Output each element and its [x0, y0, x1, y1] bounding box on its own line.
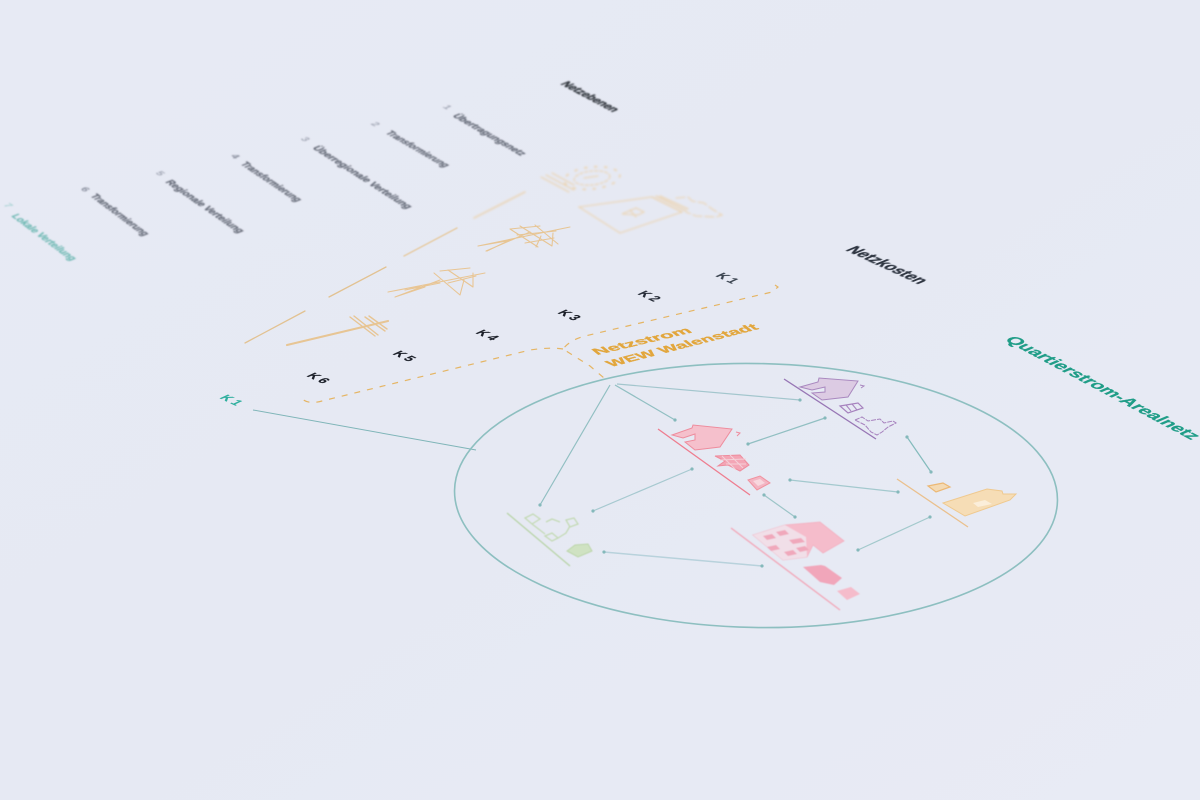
- heading: Quartierstrom-Arealnetz: Quartierstrom-Arealnetz: [1000, 334, 1200, 442]
- label: K6: K 6: [303, 371, 333, 385]
- label: level 2: Transformierung: [382, 130, 453, 169]
- label: level 5: 5: [152, 170, 167, 177]
- arrow: battery to apartment: [858, 517, 930, 550]
- label: level 2: 2: [367, 121, 383, 128]
- label: level 4: 4: [227, 153, 242, 160]
- arrow: pink to apartment: [764, 495, 795, 517]
- icon: solar panel with cloud: [579, 196, 722, 233]
- arrow: level link 2: [404, 228, 457, 256]
- label: level 3: 3: [297, 136, 313, 143]
- leader line: K1 to circle: [253, 410, 476, 450]
- arrow: green to apartment: [604, 552, 762, 566]
- label: K5: K 5: [389, 349, 419, 363]
- label: level 5: [152, 170, 247, 234]
- arrow: level link 4: [245, 311, 305, 343]
- icon: tower 2: [388, 268, 485, 297]
- label: level 6: [77, 186, 152, 237]
- arrow: hub to green: [540, 385, 610, 505]
- label: level 6: 6: [77, 186, 92, 193]
- label: level 5: Regionale Verteilung: [162, 179, 247, 234]
- icon: tower 3: [478, 225, 570, 251]
- label: level 2: [367, 121, 453, 169]
- icon: pink house group: [658, 425, 770, 495]
- dashed bracket: Netzstrom: [301, 285, 778, 402]
- panel: cost labels: [303, 271, 742, 385]
- panel: network arrows: [540, 384, 931, 566]
- panel: grid level labels: [0, 80, 624, 262]
- arrow: hub to pink house: [615, 385, 675, 420]
- icon: battery group: [897, 479, 1016, 527]
- arrow: level link 1: [474, 192, 525, 218]
- heading: Netzebenen: Netzebenen: [557, 80, 624, 113]
- label: level 4: [227, 153, 305, 203]
- arrow: hub to purple house: [617, 384, 800, 400]
- panel: grid level icons: [245, 164, 722, 345]
- label: level 1: [439, 104, 530, 157]
- circle: Arealnetz boundary: [452, 358, 1060, 633]
- label: level 7: Lokale Verteilung: [8, 213, 79, 262]
- label: level 1: Übertragungsnetz: [449, 112, 530, 157]
- label: Netzstrom WEW Walenstadt: Netzstrom: [588, 325, 695, 357]
- arrow: level link 3: [329, 267, 386, 297]
- label: level 1: 1: [439, 104, 455, 111]
- label: K3: K 3: [554, 308, 584, 322]
- icon: apartment group: [731, 522, 860, 610]
- heading: Netzkosten: Netzkosten: [841, 245, 932, 286]
- label: level 4: Transformierung: [237, 161, 305, 203]
- label: level 6: Transformierung: [87, 193, 152, 237]
- arrow: purple to battery: [907, 437, 931, 472]
- label: Netzstrom WEW Walenstadt: [588, 321, 763, 369]
- label: level 3: Überregionale Verteilung: [309, 144, 416, 210]
- label: level 7: 7: [0, 202, 15, 209]
- label: level 7: [0, 202, 79, 262]
- icon: sun: [541, 164, 621, 192]
- arrow: pink to green: [593, 469, 692, 511]
- icon: pole: [287, 316, 388, 345]
- label: K1 teal: K 1: [216, 393, 246, 407]
- label: K2: K 2: [634, 289, 664, 303]
- label: K1: K 1: [712, 271, 742, 285]
- icon: green car group: [507, 513, 592, 566]
- arrow: pink to battery: [790, 480, 898, 492]
- label: Netzstrom WEW Walenstadt: WEW Walenstadt: [602, 321, 763, 369]
- arrow: purple to pink: [748, 418, 825, 444]
- icon: purple house group: [784, 378, 896, 439]
- label: level 3: [297, 136, 416, 210]
- label: K4: K 4: [472, 328, 502, 342]
